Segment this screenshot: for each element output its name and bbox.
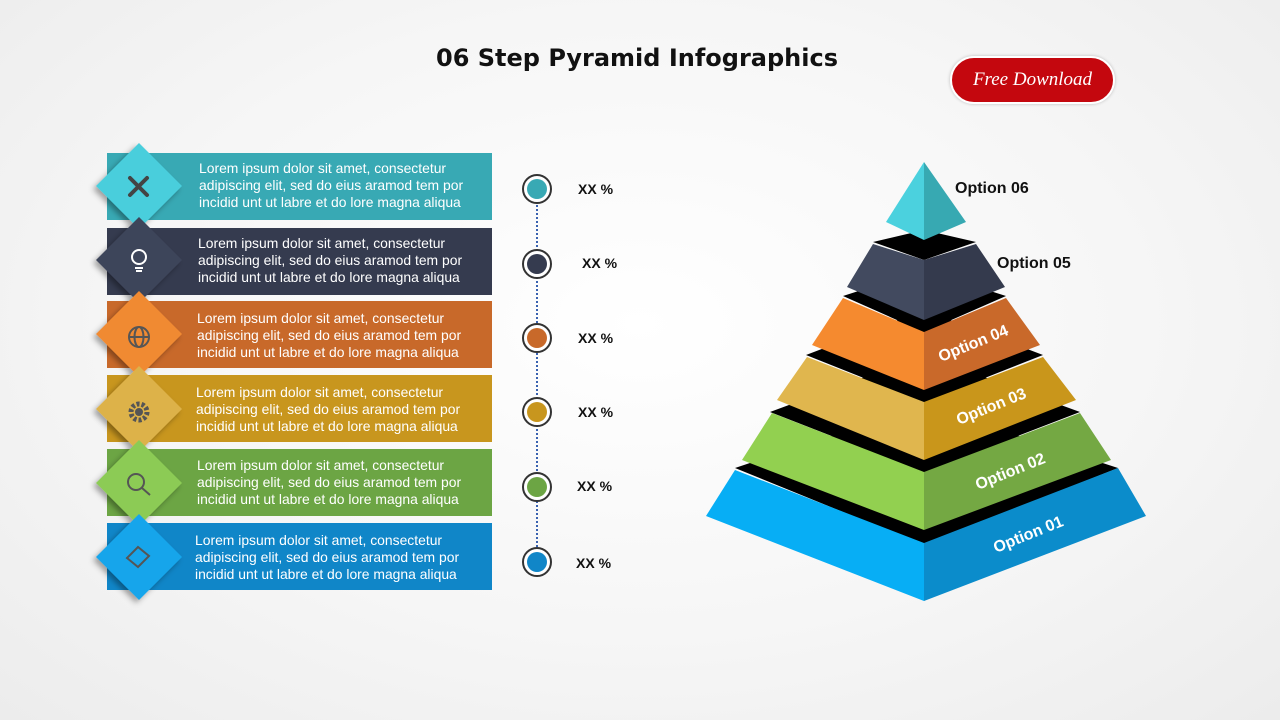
text: Lorem ipsum dolor sit amet, consectetur [195,532,442,548]
icon: globe [129,327,149,347]
panel: rows [107,153,492,590]
text: incidid unt ut labre et do lore magna aliqua [196,418,458,434]
tier 06 [886,162,966,240]
text blocks: incidid unt ut labre et do lore magna aliqua [199,194,461,210]
button: free download [950,56,1115,104]
title: 06 Step Pyramid Infographics [436,44,838,72]
tier 02 [742,355,1111,530]
tier 05 [847,230,1005,320]
pyramid labels: Option 03 [954,385,1029,429]
icon: bulb [132,250,146,271]
pyramid labels: Option 04 [936,322,1011,366]
text: Lorem ipsum dolor sit amet, consectetur [197,310,444,326]
pyramid labels: Option 02 [973,450,1048,494]
pyramid labels [936,322,1066,557]
diamonds [96,143,182,600]
pyramid: Option 05 [997,255,1071,272]
pyramid [706,162,1146,601]
tier 04 [812,270,1040,390]
icon: tools [130,178,147,195]
text: Lorem ipsum dolor sit amet, consectetur [197,457,444,473]
text blocks [199,160,463,210]
timeline: XX % [582,255,618,271]
text: incidid unt ut labre et do lore magna aliqua [195,566,457,582]
text: adipiscing elit, sed do eius aramod tem por [197,474,461,490]
text: Lorem ipsum dolor sit amet, consectetur [196,384,443,400]
button: free download: Free Download [973,69,1092,90]
text blocks: Lorem ipsum dolor sit amet, consectetur [199,160,446,176]
tier 03 [777,310,1076,460]
text: adipiscing elit, sed do eius aramod tem por [195,549,459,565]
timeline: XX % [578,181,614,197]
text: adipiscing elit, sed do eius aramod tem por [198,252,462,268]
pyramid labels: Option 01 [991,513,1066,557]
timeline: XX % [577,478,613,494]
pyramid: Option 06 [955,180,1029,197]
text: adipiscing elit, sed do eius aramod tem por [197,327,461,343]
text: incidid unt ut labre et do lore magna aliqua [197,344,459,360]
timeline [523,175,618,576]
tier 01 [706,405,1146,601]
text: incidid unt ut labre et do lore magna aliqua [198,269,460,285]
text: incidid unt ut labre et do lore magna aliqua [197,491,459,507]
icon: gear [131,404,147,420]
timeline: XX % [576,555,612,571]
text: adipiscing elit, sed do eius aramod tem por [196,401,460,417]
icon: handshake [127,547,149,567]
timeline: XX % [578,330,614,346]
timeline: XX % [578,404,614,420]
text blocks: adipiscing elit, sed do eius aramod tem por [199,177,463,193]
icon: search [128,474,150,495]
text: Lorem ipsum dolor sit amet, consectetur [198,235,445,251]
